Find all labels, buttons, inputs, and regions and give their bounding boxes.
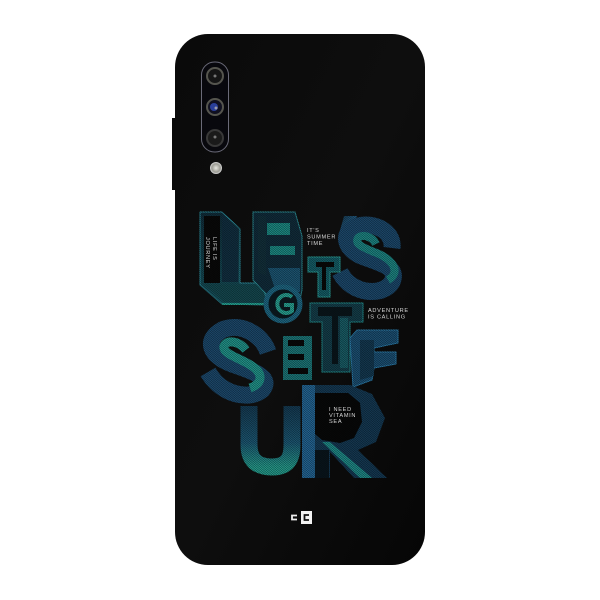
icon: lens middle	[207, 99, 223, 115]
letter S bottom	[208, 327, 268, 395]
caption: it's summer time: TIME	[307, 241, 323, 247]
caption: adventure is calling: IS CALLING	[368, 314, 406, 320]
caption: i need vitamin sea: SEA	[329, 419, 342, 425]
letter T small	[308, 257, 340, 297]
caption: i need vitamin sea: VITAMIN	[329, 413, 356, 419]
caption: adventure is calling: ADVENTURE	[368, 308, 409, 314]
caption: it's summer time	[307, 228, 336, 247]
letter F	[350, 330, 398, 387]
caption: it's summer time: SUMMER	[307, 234, 336, 240]
icon: flash	[210, 162, 222, 174]
letter L	[200, 212, 268, 305]
caption: i need vitamin sea: I NEED	[329, 407, 352, 413]
letter S top	[340, 225, 395, 291]
letter U	[249, 406, 292, 467]
apostrophe	[340, 216, 357, 230]
side button	[172, 118, 177, 190]
letter G	[266, 287, 300, 321]
caption: adventure is calling	[368, 308, 409, 320]
letter E top	[253, 212, 302, 300]
icon: lens top	[207, 68, 223, 84]
phone body	[175, 34, 425, 565]
letter R	[302, 385, 387, 478]
caption: i need vitamin sea	[329, 407, 356, 425]
letter E bottom	[283, 336, 312, 380]
logo	[292, 511, 312, 524]
caption: life is journey: JOURNEY	[204, 237, 210, 269]
icon: lens bottom	[207, 130, 223, 146]
camera module	[202, 62, 228, 174]
caption: life is journey: LIFE IS	[211, 237, 217, 261]
caption: life is journey	[204, 237, 217, 269]
lettering artwork	[200, 212, 398, 478]
caption: it's summer time: IT'S	[307, 228, 320, 234]
letter T large	[310, 303, 363, 372]
